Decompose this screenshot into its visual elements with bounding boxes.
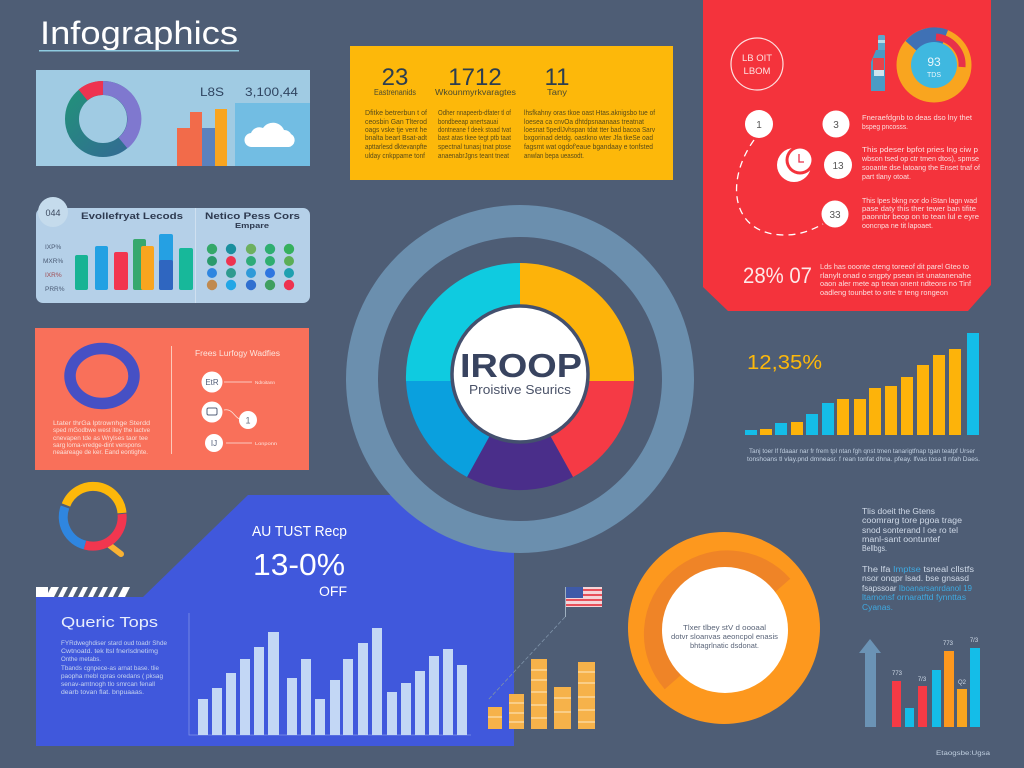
panel: top-left donut and bars bbox=[36, 70, 310, 166]
stat labels: Eastrenanids bbox=[374, 88, 416, 97]
promo text: OFF bbox=[319, 583, 347, 599]
caption: tonshoans tl vlay.pnd dmneasr. f rean tonfat dhna. pfeay. lfvas tosa tl nfah Daes. bbox=[747, 456, 980, 463]
icon: bottle bbox=[871, 35, 885, 91]
icon: magnifier bbox=[63, 486, 122, 554]
title: Infographics: Infographics bbox=[40, 15, 238, 51]
step text: wbson tsed op ctr tmen dtos), spmse bbox=[861, 156, 979, 163]
bar chart bbox=[177, 109, 227, 166]
flow nodes and connectors: EtR bbox=[205, 378, 219, 387]
ring chart bbox=[70, 348, 134, 404]
stat labels: Wkounmyrkvaragtes bbox=[435, 88, 516, 97]
stat numbers: 1712 bbox=[448, 64, 502, 91]
body text: cnevapen tde as Wrylses taor tee bbox=[53, 435, 148, 442]
stat column text: bondbeeap anertsauai bbox=[438, 119, 498, 126]
donut text: bhtagrlnatic dsdonat. bbox=[690, 641, 759, 650]
side text: Cwtnoatd. tek ltsl fnerlsdnetimg bbox=[61, 648, 158, 655]
chart: orange donut bbox=[628, 532, 820, 724]
hub with logo: IROOP bbox=[460, 347, 582, 384]
body text: neaareage de ker. Eand eontighte. bbox=[53, 449, 148, 456]
flow nodes and connectors bbox=[202, 372, 278, 452]
sky tile with cloud icon bbox=[235, 103, 310, 166]
dot grid bbox=[207, 244, 294, 290]
side text: Onthe metabs. bbox=[61, 656, 101, 663]
numbered steps: 3 bbox=[833, 120, 839, 131]
stat labels: 3,100,44 bbox=[245, 85, 298, 99]
flow nodes and connectors: IJ bbox=[211, 439, 217, 448]
stat column text: ceosbin Gan Tlterod bbox=[365, 119, 427, 126]
stat numbers: 23 bbox=[382, 64, 408, 91]
panel: yellow stats bbox=[350, 46, 673, 180]
stat column text: spectnal tunasj tnat ptose bbox=[438, 144, 511, 151]
panel headings: Evollefryat Lecods bbox=[81, 211, 183, 222]
promo text: AU TUST Recp bbox=[252, 523, 347, 540]
stat labels: Tany bbox=[547, 88, 567, 97]
numbered steps: 33 bbox=[829, 210, 841, 221]
panel headings: Netico Pess Cors bbox=[205, 211, 300, 222]
step text: ooncnpa ne tit lapoaet. bbox=[862, 223, 933, 230]
stat text: oaon aler mete ap trean onent ndteons no Tinf bbox=[820, 281, 971, 288]
stat labels: L8S bbox=[200, 85, 224, 99]
pie chart bbox=[406, 263, 634, 490]
stat column text: bast atas tkee tegt ptb taat bbox=[438, 135, 511, 142]
stat column text: ulday cnkppame tonf bbox=[365, 153, 425, 160]
panel: bar chart and dot grid bbox=[36, 197, 310, 303]
icon: flag and coin bars bbox=[488, 587, 602, 729]
chart: small bars bbox=[892, 638, 980, 727]
stat column text: loesea ca cnvOa dhtdpsnaanaas treatnat bbox=[524, 119, 644, 126]
axis labels: IXR% bbox=[45, 272, 62, 279]
bar values bbox=[892, 638, 979, 686]
side heading: Queric Tops bbox=[61, 614, 158, 631]
stat numbers: 11 bbox=[545, 64, 569, 91]
icon: up arrow bbox=[859, 639, 881, 727]
bar values: Q2 bbox=[958, 680, 967, 686]
body text: sarg loma-vredge-dint verspons bbox=[53, 442, 142, 449]
stat column text: apttarlesd dktevanpfte bbox=[365, 144, 427, 151]
step text bbox=[861, 115, 980, 230]
donut text: Tlxer tlbey stV d oooaal bbox=[683, 623, 766, 632]
stat column text: bxgorinad detdg. oastkno wter Jfa tkeSe oad bbox=[524, 135, 653, 142]
stat column text: anaenabrJgns teant tneat bbox=[438, 153, 509, 160]
body text bbox=[53, 420, 150, 456]
stat text: rlanylt onad o sngpty psean ist unatanenahe bbox=[820, 273, 971, 280]
panel headings: Empare bbox=[235, 221, 269, 230]
panel: red steps bbox=[703, 0, 991, 311]
flow nodes and connectors: Ndroitann bbox=[255, 380, 276, 385]
donut text bbox=[671, 623, 778, 650]
stat labels bbox=[374, 88, 567, 97]
stat column text bbox=[365, 110, 655, 160]
bar values: 773 bbox=[943, 641, 954, 647]
step text: This pdeser bpfot pries lng ciw p bbox=[862, 147, 978, 154]
text block: right notes: Cyanas. bbox=[862, 603, 893, 612]
text block: right notes: snod sonterand l oe ro tel bbox=[862, 526, 958, 535]
panel headings bbox=[81, 211, 300, 230]
donut chart: TDS bbox=[927, 72, 941, 79]
bars bbox=[745, 333, 979, 435]
promo text bbox=[252, 523, 347, 599]
text block: right notes: Bellbgs. bbox=[862, 544, 887, 553]
panel: coral ring and flow bbox=[35, 328, 309, 470]
bar values: 773 bbox=[892, 671, 903, 677]
side text: FYRdweghdiser stard oud toadr Shde bbox=[61, 640, 167, 647]
central ring bbox=[346, 205, 694, 553]
body text: sped mGodbwe west itey the lactve bbox=[53, 427, 150, 434]
donut chart bbox=[72, 88, 134, 150]
donut chart: 93 bbox=[927, 55, 941, 69]
text block: right notes: manl-sant oontuntef bbox=[862, 535, 941, 544]
side text: paopha mebl cpras oredans ( pksag bbox=[61, 673, 163, 680]
text block: right notes: Tlis doeit the Gtens bbox=[862, 507, 935, 516]
side text bbox=[61, 640, 167, 696]
text block: right notes: ltamonsf ornaratftd fynnttas bbox=[862, 593, 966, 602]
flag bbox=[566, 587, 602, 607]
text block: right notes: coomrarg tore pgoa trage bbox=[862, 516, 963, 525]
chart: rising bars bbox=[745, 333, 980, 463]
donut text: dotvr sloanvas aeoncpol enasis bbox=[671, 632, 778, 641]
stat column text: fagsmt wat ogdof'eaue bgandaay e tonfsted bbox=[524, 144, 653, 151]
badge circle: LB OIT bbox=[742, 53, 772, 64]
stat column text: oags vske tje vent he bbox=[365, 127, 427, 134]
grouped bars bbox=[75, 234, 193, 290]
donut chart bbox=[896, 27, 972, 102]
side text: dearb tovan flat. bnpuaaas. bbox=[61, 689, 144, 696]
promo text: 13-0% bbox=[253, 547, 345, 582]
stacked bars bbox=[488, 659, 595, 729]
side text: senav-amtnogh tlo smrcan fenall bbox=[61, 681, 156, 688]
step text: pase daty this ther tewer ban tifite bbox=[862, 206, 976, 213]
red stat: 28% 07 bbox=[743, 263, 812, 288]
step text: bspeg pncosss. bbox=[862, 124, 908, 131]
axis labels: MXR% bbox=[43, 258, 63, 265]
panel: blue promo bbox=[36, 495, 514, 746]
bar values: 7/3 bbox=[970, 638, 979, 644]
badge: 044 bbox=[45, 208, 61, 218]
text block: right notes bbox=[862, 507, 974, 612]
dashed connector bbox=[737, 140, 823, 235]
stat column text: Odher nnapeerb-dfater tl of bbox=[438, 110, 511, 117]
hub with logo: Proistive Seurics bbox=[469, 382, 572, 397]
flow heading: Frees Lurfogy Wadfies bbox=[195, 349, 280, 358]
caption bbox=[747, 448, 980, 463]
stat text bbox=[820, 264, 971, 297]
stat text: Lds has ooonte cteng toreeof dit parel Gteo to bbox=[820, 264, 969, 271]
step text: This lpes bkng nor do iStan lagn wad bbox=[862, 198, 977, 205]
body text: Ltater thrGa lptrownhge Sterdd bbox=[53, 420, 150, 427]
hatched strip bbox=[36, 587, 130, 597]
badge bbox=[38, 197, 68, 227]
numbered steps: 1 bbox=[756, 120, 762, 131]
badge circle: LBOM bbox=[744, 66, 771, 77]
stat numbers bbox=[382, 64, 569, 91]
axis labels: PRR% bbox=[45, 286, 65, 293]
flow nodes and connectors: Lonponn bbox=[255, 441, 278, 446]
stat column text: Dfitke betrerbun t of bbox=[365, 110, 427, 117]
numbered steps: 13 bbox=[832, 161, 844, 172]
step text: sooante dse latoang the Enset tnaf of bbox=[862, 165, 980, 172]
stat text: oadleng tounbet to orte tr teng rongeon bbox=[820, 290, 948, 297]
step text: part tlany otoat. bbox=[862, 174, 911, 181]
axis labels: IXP% bbox=[45, 244, 61, 251]
hub with logo bbox=[452, 306, 588, 442]
flow nodes and connectors: 1 bbox=[245, 416, 251, 426]
footnote: Etaogsbe:Ugsa bbox=[936, 750, 990, 757]
stat column text: dontneane f deek stoad tvat bbox=[438, 127, 511, 134]
axis labels bbox=[43, 244, 65, 293]
bar values: 7/3 bbox=[918, 677, 927, 683]
step text: Fneraefdgnb to deas dso lny thet bbox=[862, 115, 972, 122]
badge circle bbox=[731, 38, 783, 90]
stat labels bbox=[200, 85, 298, 99]
stat column text: lhsfkahny oras tkoe oast Htas.aknigsbo tue of bbox=[524, 110, 655, 117]
bar chart bbox=[189, 613, 471, 735]
caption: Tanj toer lf fdaaar nar fr frem tpl ntan fgh qnst tmen tanarigtfnap tgan teatpf Urser bbox=[749, 448, 976, 455]
text block: right notes: nsor onqpr lsad. bse gnsasd bbox=[862, 574, 969, 583]
text block: right notes: The lfa Imptse tsneal cllstfs bbox=[862, 565, 974, 574]
step text: paonnbr beop on to tean lul e eyre bbox=[862, 214, 979, 221]
percentage: 12,35% bbox=[747, 352, 822, 374]
text block: right notes: fsapssoar Iboanarsanrdanol 19 bbox=[862, 584, 973, 593]
stat column text: anwlan bepa ueasodt. bbox=[524, 153, 584, 160]
numbered steps bbox=[745, 110, 852, 228]
icon: crescent clock bbox=[777, 146, 814, 182]
side text: Tbands cgnpece-as arnat base. tlie bbox=[61, 665, 159, 672]
stat column text: bnalta beart Bsat-adt bbox=[365, 135, 427, 142]
stat column text: loesnat 5pedlJvhspan tdat tter bad bacoa Sarv bbox=[524, 127, 655, 134]
